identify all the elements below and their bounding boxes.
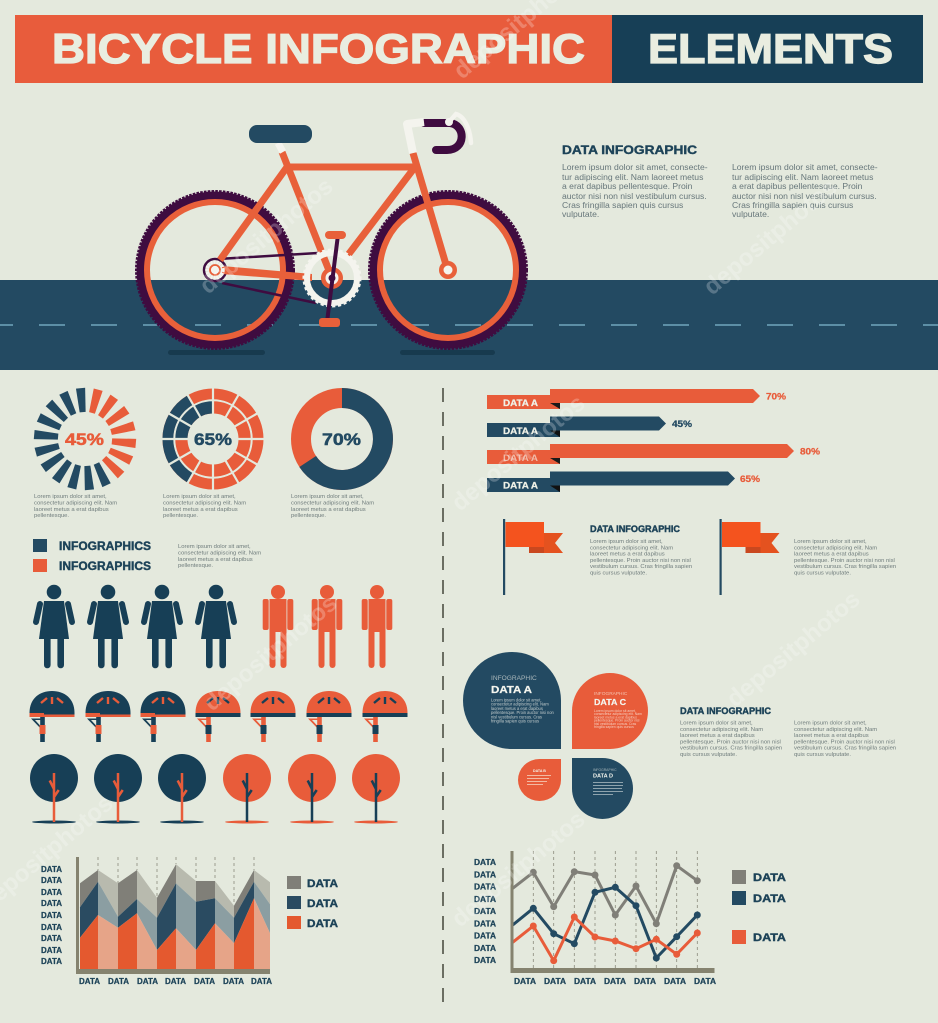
text block: petal left: pellentesque. Proin auctor nisi non nisl bbox=[680, 740, 781, 746]
text block: petal right: laoreet metus a erat dapibus bbox=[794, 733, 869, 739]
bar: 70%: 70% bbox=[766, 392, 787, 402]
petal: data a: Lorem ipsum dolor sit amet, bbox=[491, 698, 542, 702]
illustration: bicycle bbox=[136, 114, 527, 355]
segmented ring chart: 65%: 65% bbox=[194, 431, 232, 449]
area chart y labels: DATA bbox=[41, 923, 62, 932]
petal: data c: nisl vestibulum cursus. Cras bbox=[594, 722, 637, 726]
chain bbox=[204, 253, 318, 303]
handlebar bbox=[407, 114, 471, 153]
line chart x labels: DATA bbox=[544, 977, 566, 986]
caption: 45% bbox=[34, 494, 117, 519]
line chart x labels: DATA bbox=[514, 977, 536, 986]
text block: flag left: DATA INFOGRAPHIC bbox=[590, 524, 681, 534]
petal: data c bbox=[572, 673, 648, 749]
petal: data a: laoreet metus a erat dapibus bbox=[491, 706, 543, 711]
line chart legend: DATA bbox=[753, 872, 786, 884]
text block: petal left: DATA INFOGRAPHIC bbox=[680, 706, 772, 716]
text block: petal right: vestibulum cursus. Cras fringilla sapien bbox=[794, 746, 896, 752]
text block: flag right: laoreet metus a erat dapibus bbox=[794, 552, 869, 558]
legend description bbox=[178, 544, 261, 569]
area chart y labels: DATA bbox=[41, 911, 62, 920]
text block: petal left: vestibulum cursus. Cras fringilla sapien bbox=[680, 746, 782, 752]
text: depositphotos bbox=[199, 590, 343, 717]
bar: 80%: 80% bbox=[800, 446, 821, 458]
title: elements bbox=[612, 15, 923, 83]
area chart x labels bbox=[79, 977, 272, 986]
line chart x labels: DATA bbox=[574, 977, 596, 986]
area chart legend: DATA bbox=[307, 878, 338, 890]
radial chart: 45% bbox=[34, 388, 136, 490]
bar: 65%: DATA A bbox=[503, 480, 539, 490]
legend: infographics: INFOGRAPHICS bbox=[59, 541, 151, 553]
text block: right column: auctor nisi non nisl vestibulum cursus. bbox=[732, 191, 877, 201]
line chart y labels: DATA bbox=[474, 858, 496, 867]
ribbon bar chart bbox=[487, 389, 821, 492]
line chart y labels: DATA bbox=[474, 895, 496, 904]
petal: data a: pellentesque. Proin auctor nisi non bbox=[491, 710, 555, 715]
line chart y labels: DATA bbox=[474, 944, 496, 953]
text block: petal right: quis cursus vulputate. bbox=[794, 752, 851, 758]
text block: petal left: quis cursus vulputate. bbox=[680, 752, 737, 758]
icon: flag right bbox=[720, 519, 780, 595]
text block: flag right: pellentesque. Proin auctor nisi non nisl bbox=[794, 558, 895, 564]
text block: flag left: vestibulum cursus. Cras fringilla sapien bbox=[590, 564, 692, 570]
line chart y labels: DATA bbox=[474, 919, 496, 928]
text: depositphotos bbox=[447, 390, 591, 517]
text block: petal right: consectetur adipiscing elit. Nam bbox=[794, 727, 877, 733]
petal: data c: fringilla sapien quis cursus bbox=[594, 725, 634, 729]
text block: flag right bbox=[794, 539, 896, 576]
area chart y labels: DATA bbox=[41, 957, 62, 966]
bar: 80% bbox=[487, 444, 821, 464]
text block: data infographic: Cras fringilla sapien quis cursus bbox=[562, 200, 683, 210]
text block: flag left: consectetur adipiscing elit. Nam bbox=[590, 546, 673, 552]
legend description: pellentesque. bbox=[178, 563, 213, 569]
petal: data c: DATA C bbox=[594, 697, 626, 707]
pictogram: men bbox=[263, 585, 392, 665]
text block: data infographic: auctor nisi non nisl vestibulum cursus. bbox=[562, 191, 707, 201]
text block: right column: Lorem ipsum dolor sit amet, consecte- bbox=[732, 162, 878, 172]
caption: 70%: laoreet metus a erat dapibus bbox=[291, 507, 366, 513]
legend: infographics bbox=[33, 539, 151, 573]
petal: data b bbox=[518, 759, 561, 801]
caption: 65% bbox=[163, 494, 246, 519]
caption: 70% bbox=[291, 494, 374, 519]
legend: infographics: INFOGRAPHICS bbox=[59, 561, 151, 573]
bar: 65%: 65% bbox=[740, 474, 761, 485]
pictogram: helmets bbox=[30, 691, 408, 742]
header banner bbox=[15, 15, 923, 83]
chain stay bbox=[222, 266, 312, 281]
area chart legend: DATA bbox=[307, 918, 338, 930]
series: orange bbox=[513, 914, 701, 964]
bar: 65% bbox=[487, 472, 761, 492]
bar: 80%: DATA A bbox=[503, 453, 539, 463]
area chart x labels: DATA bbox=[108, 977, 129, 986]
text block: petal left: laoreet metus a erat dapibus bbox=[680, 733, 755, 739]
frame bbox=[220, 152, 447, 278]
area chart y labels: DATA bbox=[41, 865, 62, 874]
series: navy bbox=[513, 884, 701, 962]
area chart legend: DATA bbox=[307, 898, 338, 910]
area chart x labels: DATA bbox=[223, 977, 244, 986]
segmented ring chart: 65% bbox=[161, 387, 265, 491]
line chart y labels: DATA bbox=[474, 870, 496, 879]
text: depositphotos bbox=[722, 586, 866, 713]
text block: flag right: Lorem ipsum dolor sit amet, bbox=[794, 539, 867, 545]
bar: 70% bbox=[487, 389, 787, 409]
text block: flag left: pellentesque. Proin auctor nisi non nisl bbox=[590, 558, 691, 564]
center dashed divider bbox=[442, 388, 444, 1005]
bar: 45%: 45% bbox=[672, 419, 693, 430]
text block: flag right: quis cursus vulputate. bbox=[794, 570, 851, 576]
text block: petal right: Lorem ipsum dolor sit amet, bbox=[794, 720, 867, 726]
text block: data infographic: Lorem ipsum dolor sit amet, consecte- bbox=[562, 162, 708, 172]
line chart legend: DATA bbox=[753, 893, 786, 905]
text block: data infographic: tur adipiscing elit. Nam laoreet metus bbox=[562, 172, 703, 182]
series: grey bbox=[513, 862, 701, 927]
caption: 65%: laoreet metus a erat dapibus bbox=[163, 507, 238, 513]
petal: data c: laoreet metus a erat dapibus bbox=[594, 715, 637, 719]
text block: flag right: vestibulum cursus. Cras fringilla sapien bbox=[794, 564, 896, 570]
bar: 45% bbox=[487, 416, 693, 437]
line chart bbox=[510, 851, 714, 973]
caption: 45%: pellentesque. bbox=[34, 513, 69, 519]
title: elements: ELEMENTS bbox=[648, 25, 893, 72]
text block: right column: Cras fringilla sapien quis cursus bbox=[732, 200, 853, 210]
caption: 70%: pellentesque. bbox=[291, 513, 326, 519]
donut chart: 70% bbox=[301, 398, 383, 480]
crank and pedals bbox=[319, 231, 346, 327]
text block: data infographic: DATA INFOGRAPHIC bbox=[562, 143, 697, 157]
petal: data a: INFOGRAPHIC bbox=[491, 675, 537, 682]
caption: 45%: Lorem ipsum dolor sit amet, bbox=[34, 494, 107, 500]
area chart y labels: DATA bbox=[41, 876, 62, 885]
text block: flag left bbox=[590, 524, 692, 576]
line chart y labels: DATA bbox=[474, 956, 496, 965]
pictogram: trees bbox=[30, 754, 400, 824]
caption: 65%: Lorem ipsum dolor sit amet, bbox=[163, 494, 236, 500]
text block: right column: vulputate. bbox=[732, 209, 769, 219]
text block: petal left: consectetur adipiscing elit. Nam bbox=[680, 727, 763, 733]
text: depositphotos bbox=[699, 174, 843, 301]
area chart x labels: DATA bbox=[79, 977, 100, 986]
petal: data a: nisl vestibulum cursus. Cras bbox=[491, 714, 542, 719]
petal: data a bbox=[463, 652, 561, 749]
petal: data c: Lorem ipsum dolor sit amet, bbox=[594, 709, 636, 713]
area chart y labels: DATA bbox=[41, 888, 62, 897]
petal: data d bbox=[572, 758, 633, 819]
caption: 70%: Lorem ipsum dolor sit amet, bbox=[291, 494, 364, 500]
line chart y labels bbox=[474, 858, 496, 965]
text block: petal left bbox=[680, 706, 782, 758]
saddle bbox=[249, 125, 312, 143]
pictogram: women bbox=[36, 585, 234, 665]
line chart x labels: DATA bbox=[634, 977, 656, 986]
text block: flag left: laoreet metus a erat dapibus bbox=[590, 552, 665, 558]
area chart x labels: DATA bbox=[251, 977, 272, 986]
petal: data a: DATA A bbox=[491, 684, 532, 696]
petal: data d: DATA D bbox=[593, 774, 613, 780]
seat post bbox=[278, 143, 283, 152]
text block: petal left: Lorem ipsum dolor sit amet, bbox=[680, 720, 753, 726]
legend description: consectetur adipiscing elit. Nam bbox=[178, 550, 261, 556]
line chart x labels: DATA bbox=[664, 977, 686, 986]
text: depositphotos bbox=[447, 806, 591, 933]
wheel shadows bbox=[168, 350, 495, 355]
legend description: Lorem ipsum dolor sit amet, bbox=[178, 544, 251, 550]
area chart y labels bbox=[41, 865, 62, 966]
text block: right column bbox=[732, 162, 878, 219]
caption: 45%: laoreet metus a erat dapibus bbox=[34, 507, 109, 513]
area chart bbox=[76, 857, 270, 974]
area chart legend bbox=[287, 876, 338, 930]
caption: 70%: consectetur adipiscing elit. Nam bbox=[291, 500, 374, 506]
caption: 65%: consectetur adipiscing elit. Nam bbox=[163, 500, 246, 506]
bar: 45%: DATA A bbox=[503, 426, 539, 436]
line chart x labels: DATA bbox=[694, 977, 716, 986]
road bbox=[0, 280, 938, 370]
area chart x labels: DATA bbox=[194, 977, 215, 986]
petal diagram bbox=[463, 652, 648, 819]
line chart y labels: DATA bbox=[474, 932, 496, 941]
area chart y labels: DATA bbox=[41, 946, 62, 955]
caption: 45%: consectetur adipiscing elit. Nam bbox=[34, 500, 117, 506]
text block: flag left: quis cursus vulputate. bbox=[590, 570, 647, 576]
front hub bbox=[439, 261, 457, 279]
chainring bbox=[304, 250, 360, 306]
rear hub bbox=[207, 262, 223, 278]
caption: 65%: pellentesque. bbox=[163, 513, 198, 519]
area chart y labels: DATA bbox=[41, 934, 62, 943]
text block: right column: tur adipiscing elit. Nam laoreet metus bbox=[732, 172, 873, 182]
petal: data a: fringilla sapien quis cursus bbox=[491, 718, 539, 724]
petal: data a: consectetur adipiscing elit. Nam bbox=[491, 702, 549, 707]
line chart y labels: DATA bbox=[474, 907, 496, 916]
area chart y labels: DATA bbox=[41, 899, 62, 908]
petal: data c: pellentesque. Proin auctor nisi bbox=[594, 719, 640, 723]
petal: data c: consectetur adipiscing elit. Nam bbox=[594, 712, 642, 716]
text block: flag right: consectetur adipiscing elit. Nam bbox=[794, 546, 877, 552]
legend description: laoreet metus a erat dapibus bbox=[178, 557, 253, 563]
area chart x labels: DATA bbox=[137, 977, 158, 986]
text: depositphotos bbox=[195, 173, 339, 300]
area chart x labels: DATA bbox=[165, 977, 186, 986]
text block: data infographic: a erat dapibus pellentesque. Proin bbox=[562, 181, 693, 191]
text block: data infographic bbox=[562, 143, 708, 219]
radial chart: 45%: 45% bbox=[65, 431, 104, 449]
title: bicycle infographic bbox=[15, 15, 612, 83]
line chart legend bbox=[732, 870, 786, 944]
text block: right column: a erat dapibus pellentesque. Proin bbox=[732, 181, 863, 191]
line chart y labels: DATA bbox=[474, 883, 496, 892]
text block: petal right: pellentesque. Proin auctor nisi non nisl bbox=[794, 740, 895, 746]
text block: data infographic: vulputate. bbox=[562, 209, 599, 219]
line chart x labels bbox=[514, 977, 716, 986]
front wheel bbox=[369, 191, 527, 349]
line chart x labels: DATA bbox=[604, 977, 626, 986]
bar: 70%: DATA A bbox=[503, 398, 539, 408]
petal: data c: INFOGRAPHIC bbox=[594, 691, 628, 697]
line chart legend: DATA bbox=[753, 932, 786, 944]
petal: data b: DATA B bbox=[533, 769, 546, 773]
text block: petal right bbox=[794, 720, 896, 758]
title: bicycle infographic: BICYCLE INFOGRAPHIC bbox=[52, 25, 585, 72]
text block: flag left: Lorem ipsum dolor sit amet, bbox=[590, 539, 663, 545]
rear wheel bbox=[136, 191, 294, 349]
icon: flag left bbox=[503, 519, 563, 595]
donut chart: 70%: 70% bbox=[322, 431, 361, 449]
petal: data d: INFOGRAPHIC bbox=[593, 768, 617, 772]
